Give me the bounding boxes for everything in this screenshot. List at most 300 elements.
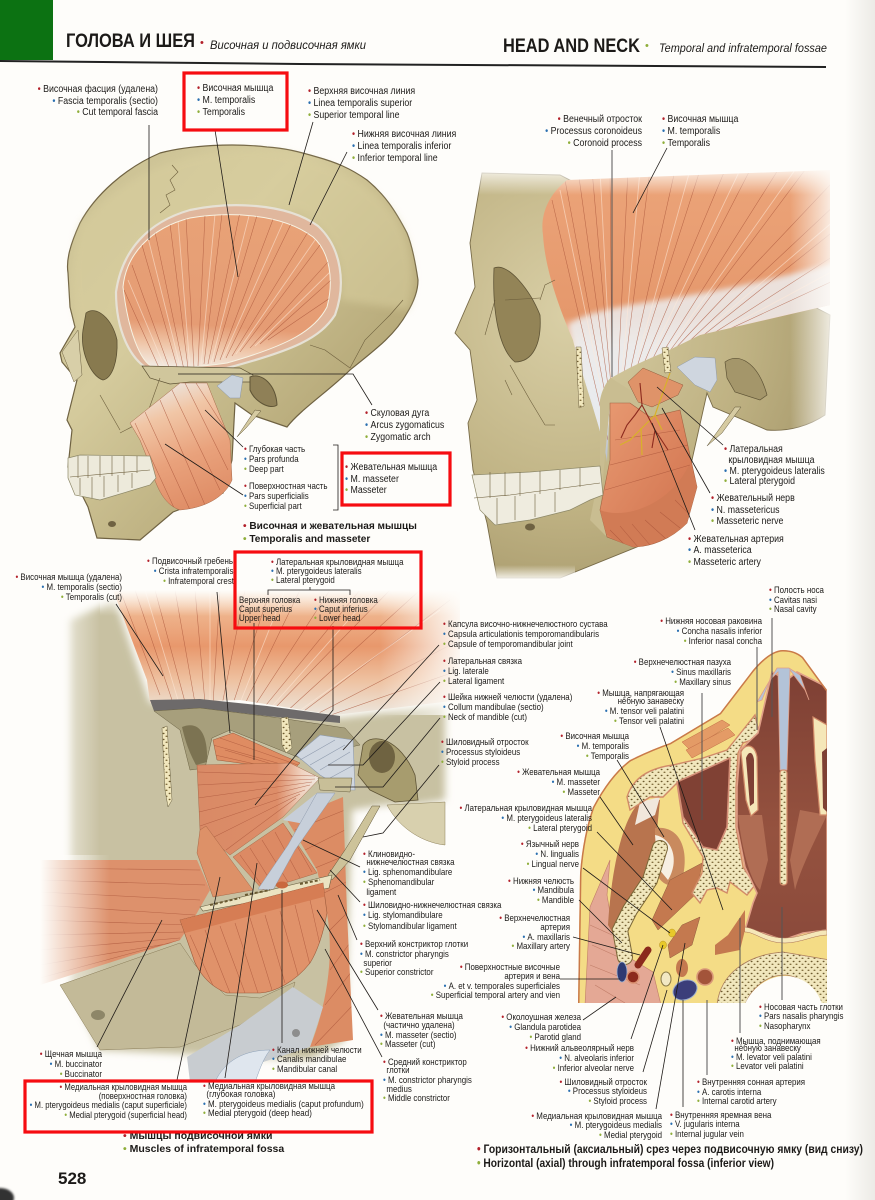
label: nasal cavity: • Nasal cavity <box>769 603 817 614</box>
label: middle constrictor: • Средний констриктор <box>383 1056 467 1067</box>
label: zygomatic arch <box>365 406 445 442</box>
nerve branches <box>620 373 670 455</box>
label: internal jugular vein <box>670 1109 772 1139</box>
label: superficial temporal vessels: • A. et v. temporales superficiales <box>444 980 560 991</box>
label: internal carotid artery <box>697 1076 805 1106</box>
hyoid region bright patch <box>215 1050 270 1082</box>
label: neck of mandible: • Шейка нижней челюсти (удалена) <box>443 691 572 702</box>
label: medial pterygoid deep head: • Medial pterygoid (deep head) <box>203 1107 312 1118</box>
sphenomandibular ligament <box>258 793 335 890</box>
label: mandibular canal: • Канал нижней челюсти <box>272 1044 362 1055</box>
label: medial pterygoid superficial head: • Медиальная крыловидная мышца <box>60 1081 187 1092</box>
label: tensor veli palatini: • M. tensor veli palatini <box>605 705 684 716</box>
label: sphenomandibular ligament: • Клиновидно- <box>363 848 415 859</box>
label: masseter: • Masseter <box>345 483 387 495</box>
label: neck of mandible: • Collum mandibulae (sectio) <box>443 701 544 712</box>
label: buccinator: • Щечная мышца <box>40 1048 102 1059</box>
callout: medial pterygoid highlight box <box>25 1081 372 1132</box>
label: mandible: • Mandible <box>537 894 574 905</box>
label: parotid gland <box>501 1011 581 1042</box>
label: superficial temporal vessels: • Superficial temporal artery and vien <box>431 989 560 1000</box>
label: temporalis <box>197 81 274 117</box>
label: masseter <box>345 460 438 495</box>
buccinator <box>40 860 210 985</box>
figure title: infratemporal muscles <box>123 1130 284 1155</box>
label: lateral pterygoid heads: Верхняя головка <box>239 594 300 605</box>
label: lateral pterygoid section: • M. pterygoideus lateralis <box>501 812 592 823</box>
white fade over top and right <box>470 165 840 195</box>
styloid ring <box>661 972 671 986</box>
label: temporalis cut: • Височная мышца (удалена) <box>15 571 122 582</box>
label: masseteric artery <box>688 532 784 567</box>
label: temporalis right: • Temporalis <box>662 136 710 148</box>
label: medial pterygoid section: • M. pterygoideus medialis <box>570 1119 662 1130</box>
label: temporalis: • Temporalis <box>197 105 245 117</box>
label: inferior nasal concha: • Inferior nasal concha <box>684 635 762 646</box>
label: maxillary artery: артерия <box>540 921 570 932</box>
label: superior constrictor <box>360 938 468 977</box>
masseter cut <box>180 883 327 993</box>
label: sphenomandibular ligament: ligament <box>366 886 397 897</box>
page number: 528 <box>58 1169 86 1188</box>
label: tensor veli palatini: • Tensor veli palatini <box>614 715 684 726</box>
header: russian title <box>66 31 367 52</box>
label: lingual nerve: • Язычный нерв <box>521 838 579 849</box>
label: parotid gland: • Parotid gland <box>529 1031 581 1042</box>
label: masseteric artery: • A. masseterica <box>688 543 752 555</box>
nasal opening <box>62 330 82 382</box>
label: maxillary sinus: • Maxillary sinus <box>674 676 731 687</box>
illustration: deep dissection with temporalis, masseter cut <box>455 165 840 581</box>
mandible <box>620 848 660 957</box>
figure title: axial section <box>477 1144 863 1170</box>
label: zygomatic arch: • Скуловая дуга <box>365 406 430 418</box>
label: maxillary artery <box>499 912 571 951</box>
label: lingual nerve: • Lingual nerve <box>527 858 579 869</box>
label: superior temporal line: • Superior temporal line <box>308 108 400 120</box>
label: temporalis: • M. temporalis <box>197 93 256 105</box>
maxilla and zygomatic bones <box>627 715 760 903</box>
figure title: temporalis and masseter: • Височная и жевательная мышцы <box>243 521 417 532</box>
label: deep part: • Pars profunda <box>244 453 299 464</box>
label: tensor veli palatini <box>597 687 685 726</box>
illustration: infratemporal fossa dissection <box>40 590 465 1082</box>
label: levator veli palatini: • Levator veli palatini <box>731 1060 804 1071</box>
temporal line band <box>116 205 341 370</box>
label: nasal cavity: • Cavitas nasi <box>769 594 817 605</box>
label: styloid process section: • Шиловидный отросток <box>559 1076 647 1087</box>
maxillary artery <box>638 950 648 965</box>
label: masseter cut: (частично удалена) <box>383 1019 455 1030</box>
label: medial pterygoid superficial head: • M. pterygoideus medialis (caput superficiale) <box>30 1099 187 1110</box>
label: parotid gland: • Околоушная железа <box>501 1011 581 1022</box>
label: lingual nerve <box>521 838 579 869</box>
label: temporalis right: • M. temporalis <box>662 124 721 136</box>
label: masseteric artery: • Жевательная артерия <box>688 532 784 544</box>
temporalis muscle <box>542 170 830 462</box>
label: maxillary sinus: • Верхнечелюстная пазуха <box>634 656 731 667</box>
parotid gland <box>585 860 661 1005</box>
label: mandible: • Mandibula <box>533 884 574 895</box>
label: lateral pterygoid heads: • Caput inferius <box>314 603 368 614</box>
label: mandibular canal <box>272 1044 362 1074</box>
right concha <box>813 717 827 815</box>
medial pterygoid <box>668 917 700 958</box>
label: internal jugular vein: • Internal jugular vein <box>670 1128 744 1139</box>
label: masseter cut: • Жевательная мышца <box>380 1010 463 1021</box>
tmj capsule <box>677 357 717 392</box>
label: middle constrictor: • M. constrictor pharyngis <box>383 1074 472 1085</box>
label: superficial temporal vessels: • Поверхностные височные <box>460 961 560 972</box>
temporalis <box>655 828 685 885</box>
lateral pterygoid <box>628 368 683 407</box>
label: coronoid process: • Coronoid process <box>568 136 642 148</box>
label: mandible: • Нижняя челюсть <box>508 875 574 886</box>
temporalis muscle <box>123 215 330 368</box>
label: buccinator: • M. buccinator <box>50 1058 102 1069</box>
label: inferior temporal line: • Inferior temporal line <box>352 151 438 163</box>
label: sphenomandibular ligament: • Sphenomandibular <box>363 876 434 887</box>
header: russian title: • <box>200 37 204 49</box>
mental foramen <box>525 524 535 530</box>
inferior conchae folds <box>738 815 768 890</box>
label: masseter section <box>517 766 600 797</box>
green chapter tab <box>0 0 53 60</box>
label: stylomandibular ligament: • Шиловидно-нижнечелюстная связка <box>363 899 502 910</box>
ear canal <box>250 376 277 407</box>
label: temporalis: • Височная мышца <box>197 81 274 93</box>
label: temporalis cut <box>15 571 122 602</box>
cut ends of zygoma <box>162 726 172 807</box>
leader lines <box>97 122 782 1109</box>
label: lateral pterygoid upper right: • M. pterygoideus lateralis <box>724 464 825 476</box>
label: superior constrictor: • M. constrictor pharyngis <box>360 948 449 959</box>
label: stylomandibular ligament: • Stylomandibular ligament <box>363 920 457 931</box>
label: internal carotid artery: • Internal carotid artery <box>697 1095 777 1106</box>
maxillary sinus <box>677 758 730 850</box>
label: lateral pterygoid heads: • Латеральная крыловидная мышца <box>271 556 404 567</box>
label: levator veli palatini: • Мышца, поднимающая <box>731 1035 821 1046</box>
label: infratemporal crest: • Crista infratemporalis <box>154 565 233 576</box>
skull sutures <box>100 165 403 433</box>
label: nasopharynx: • Nasopharynx <box>759 1020 811 1031</box>
label: lateral pterygoid section <box>460 802 592 833</box>
label: tmj capsule: • Capsule of temporomandibular joint <box>443 638 573 649</box>
header: english title <box>503 36 827 57</box>
label: internal carotid artery: • Внутренняя сонная артерия <box>697 1076 805 1087</box>
label: lateral pterygoid upper right: • Lateral pterygoid <box>724 474 795 486</box>
label: masseteric nerve: • Жевательный нерв <box>711 491 795 503</box>
label: coronoid process: • Processus coronoideus <box>545 124 642 136</box>
zygomatic arch <box>142 366 253 384</box>
label: styloid process: • Processus styloideus <box>441 746 520 757</box>
label: temporal fascia: • Cut temporal fascia <box>77 105 159 117</box>
label: styloid process section <box>559 1076 647 1106</box>
label: lateral pterygoid section: • Латеральная крыловидная мышца <box>460 802 592 813</box>
styloid process <box>237 410 261 437</box>
label: infratemporal crest <box>147 555 235 586</box>
label: lateral pterygoid heads: • Нижняя головка <box>314 594 378 605</box>
grey fascia patch <box>283 793 334 825</box>
label: lateral ligament <box>443 655 522 686</box>
mastoid <box>387 802 445 845</box>
label: levator veli palatini <box>731 1035 821 1071</box>
label: masseter cut: • Masseter (cut) <box>380 1038 436 1049</box>
label: maxillary artery: • A. maxillaris <box>522 931 570 942</box>
pharyngeal constrictor <box>287 797 353 1047</box>
label: tmj capsule <box>443 618 608 649</box>
label: coronoid process: • Венечный отросток <box>558 112 643 124</box>
label: superior constrictor: • Верхний констриктор глотки <box>360 938 468 949</box>
header rule <box>0 60 826 68</box>
medial pterygoid deep head <box>233 823 317 890</box>
label: masseteric artery: • Masseteric artery <box>688 555 761 567</box>
label: masseter section: • Masseter <box>563 786 600 797</box>
figure title: infratemporal muscles: • Мышцы подвисочной ямки <box>123 1130 272 1142</box>
pterygoid muscle near pharynx <box>715 910 745 955</box>
label: masseteric nerve <box>711 491 795 526</box>
label: temporal fascia <box>38 82 159 117</box>
label: styloid process: • Шиловидный отросток <box>441 736 529 747</box>
label: inferior temporal line: • Нижняя височная линия <box>352 127 456 139</box>
nasal septum <box>757 668 809 770</box>
nasal cavity <box>737 672 827 940</box>
label: lateral ligament: • Lateral ligament <box>443 675 505 686</box>
label: mandible <box>508 875 574 905</box>
label: superior constrictor: • Superior constrictor <box>360 966 434 977</box>
header: english title: HEAD AND NECK <box>503 36 640 57</box>
lateral pterygoid lower head <box>197 763 320 855</box>
label: superior constrictor: superior <box>363 957 392 968</box>
mandible lower bone <box>60 943 295 1050</box>
callout: masseter highlight box <box>342 453 450 505</box>
temporal vein <box>617 962 627 982</box>
label: zygomatic arch: • Zygomatic arch <box>365 430 431 442</box>
label: lateral pterygoid heads: • M. pterygoideus lateralis <box>271 565 362 576</box>
left bone fade <box>40 600 100 860</box>
label: lateral pterygoid heads <box>239 556 404 623</box>
label: nasopharynx: • Носовая часть глотки <box>759 1001 843 1012</box>
label: temporalis right: • Височная мышца <box>662 112 739 124</box>
styloid process <box>328 806 380 880</box>
left concha <box>741 746 758 816</box>
mandibular canal <box>276 882 288 888</box>
label: lateral pterygoid upper right: крыловидная мышца <box>728 453 815 465</box>
label: lateral pterygoid heads: • Lower head <box>314 612 360 623</box>
label: styloid process section: • Processus styloideus <box>568 1085 647 1096</box>
label: inferior nasal concha: • Нижняя носовая раковина <box>660 615 762 626</box>
label: superficial part: • Pars superficialis <box>244 490 309 501</box>
styloid process <box>707 407 741 446</box>
facial sutures <box>485 280 555 425</box>
cranium shading <box>72 149 413 340</box>
cut zygomatic bones <box>576 347 584 408</box>
label: neck of mandible <box>443 691 572 722</box>
label: medial pterygoid superficial head <box>30 1081 187 1120</box>
articular fossa <box>358 739 418 802</box>
callout: lateral pterygoid highlight box <box>235 552 421 628</box>
label: maxillary sinus: • Sinus maxillaris <box>671 666 731 677</box>
muscle above jugular <box>676 959 688 977</box>
label: coronoid process <box>545 112 643 148</box>
label: inferior nasal concha <box>660 615 762 646</box>
label: medial pterygoid superficial head: (поверхностная головка) <box>99 1090 187 1101</box>
skull base bone <box>717 952 830 1005</box>
label: temporalis section: • Височная мышца <box>560 730 629 741</box>
temporal artery <box>627 971 639 983</box>
figure title: axial section: • Horizontal (axial) through infratemporal fossa (inferior view) <box>477 1158 774 1170</box>
nerves <box>668 929 676 937</box>
label: middle constrictor: medius <box>386 1083 412 1094</box>
upper and lower teeth <box>68 455 156 500</box>
label: nasopharynx: • Pars nasalis pharyngis <box>759 1010 843 1021</box>
label: maxillary artery: • Maxillary artery <box>511 940 571 951</box>
label: neck of mandible: • Neck of mandible (cut) <box>443 711 527 722</box>
label: superior temporal line <box>308 84 415 120</box>
label: nasal cavity: • Полость носа <box>769 584 824 595</box>
illustration: axial section through infratemporal fossa <box>570 640 830 1010</box>
label: styloid process <box>441 736 529 767</box>
header: russian title: ГОЛОВА И ШЕЯ <box>66 31 195 52</box>
label: medial pterygoid deep head: (глубокая головка) <box>206 1088 276 1099</box>
label: middle constrictor: • Middle constrictor <box>383 1092 450 1103</box>
label: medial pterygoid deep head <box>203 1080 364 1118</box>
label: superficial temporal vessels <box>431 961 560 1000</box>
label: masseter section: • Жевательная мышца <box>517 766 600 777</box>
masseter <box>130 383 232 510</box>
label: lateral pterygoid upper right <box>724 442 825 486</box>
header: russian title: Височная и подвисочная ямки <box>210 40 367 52</box>
label: middle constrictor <box>383 1056 472 1103</box>
label: temporalis right <box>662 112 739 148</box>
teeth <box>472 466 603 525</box>
label: medial pterygoid section <box>531 1110 662 1140</box>
mandible cut section <box>200 875 332 911</box>
page corner shadow <box>0 1188 14 1200</box>
label: superficial part: • Поверхностная часть <box>244 480 328 491</box>
figure title: infratemporal muscles: • Muscles of infratemporal fossa <box>123 1143 284 1155</box>
medial pterygoid superficial head <box>197 826 253 897</box>
label: inferior alveolar nerve: • N. alveolaris inferior <box>559 1052 634 1063</box>
label: superficial part <box>244 480 328 511</box>
label: medial pterygoid deep head: • M. pterygoideus medialis (caput profundum) <box>203 1098 364 1109</box>
label: sphenomandibular ligament <box>363 848 455 897</box>
label: tmj capsule: • Capsula articulationis temporomandibularis <box>443 628 599 639</box>
label: inferior temporal line <box>352 127 456 163</box>
lateral pterygoid <box>652 863 702 930</box>
label: masseteric nerve: • N. massetericus <box>711 503 780 515</box>
label: masseter: • Жевательная мышца <box>345 460 438 472</box>
label: superficial part: • Superficial part <box>244 500 302 511</box>
label: temporalis section <box>560 730 629 761</box>
label: lateral ligament: • Латеральная связка <box>443 655 522 666</box>
eye orbit <box>494 267 540 362</box>
masseter cut <box>600 403 697 547</box>
label: levator veli palatini: • M. levator veli palatini <box>731 1051 812 1062</box>
jugular vein <box>672 979 698 1001</box>
label: inferior alveolar nerve <box>525 1042 634 1073</box>
label: infratemporal crest: • Подвисочный гребень <box>147 555 233 566</box>
carotid vessel <box>697 969 713 985</box>
label: nasal cavity <box>769 584 824 614</box>
label: tmj capsule: • Капсула височно-нижнечелюстного сустава <box>443 618 608 629</box>
label: styloid process: • Styloid process <box>441 756 500 767</box>
label: masseter cut <box>380 1010 463 1049</box>
label: parotid gland: • Glandula parotidea <box>509 1021 581 1032</box>
label: masseter cut: • M. masseter (sectio) <box>380 1029 457 1040</box>
coronoid process <box>590 378 640 537</box>
temporalis muscle <box>113 590 460 715</box>
tmj capsule and ligament <box>296 735 355 790</box>
label: masseteric nerve: • Masseteric nerve <box>711 514 783 526</box>
label: deep part: • Глубокая часть <box>244 443 306 454</box>
label: superior temporal line: • Linea temporalis superior <box>308 96 412 108</box>
label: lateral pterygoid section: • Lateral pterygoid <box>528 822 592 833</box>
label: zygomatic arch: • Arcus zygomaticus <box>365 418 445 430</box>
label: styloid process section: • Styloid process <box>588 1095 647 1106</box>
label: temporalis cut: • Temporalis (cut) <box>61 591 122 602</box>
label: levator veli palatini: нёбную занавеску <box>734 1042 801 1053</box>
label: infratemporal crest: • Infratemporal crest <box>163 575 235 586</box>
masseter <box>608 800 660 945</box>
label: stylomandibular ligament: • Lig. stylomandibulare <box>363 909 443 920</box>
label: lateral pterygoid heads: • Lateral pterygoid <box>271 574 335 585</box>
header: english title: Temporal and infratemporal fossae <box>659 43 827 55</box>
label: stylomandibular ligament <box>363 899 502 931</box>
label: masseter: • M. masseter <box>345 472 399 484</box>
label: internal jugular vein: • Внутренняя яремная вена <box>670 1109 772 1120</box>
label: internal jugular vein: • V. jugularis interna <box>670 1118 740 1129</box>
mandibular neck cut <box>318 778 352 792</box>
label: inferior alveolar nerve: • Inferior alveolar nerve <box>553 1062 634 1073</box>
label: middle constrictor: глотки <box>386 1064 410 1075</box>
ear fossa <box>725 358 767 400</box>
label: maxillary artery: • Верхнечелюстная <box>499 912 570 923</box>
mental foramen <box>108 521 116 527</box>
eye orbit <box>82 311 117 380</box>
label: lateral pterygoid upper right: • Латеральная <box>724 442 783 454</box>
callout: temporalis highlight box <box>184 73 287 130</box>
figure title: temporalis and masseter: • Temporalis and masseter <box>243 534 370 545</box>
label: internal carotid artery: • A. carotis interna <box>697 1086 761 1097</box>
illustration: skull with temporalis and masseter <box>60 145 418 540</box>
label: medial pterygoid section: • Медиальная крыловидная мышца <box>531 1110 662 1121</box>
label: sphenomandibular ligament: • Lig. sphenomandibulare <box>363 866 452 877</box>
grey fascia under mandible <box>187 987 323 1082</box>
skin border <box>578 650 827 1003</box>
label: lingual nerve: • N. lingualis <box>535 848 579 859</box>
label: buccinator <box>40 1048 102 1079</box>
palate edge <box>743 927 827 943</box>
label: tensor veli palatini: • Мышца, напрягающая <box>597 687 684 698</box>
label: mandibular canal: • Mandibular canal <box>272 1063 337 1074</box>
tmj capsule <box>217 375 243 398</box>
label: temporalis cut: • M. temporalis (sectio) <box>42 581 122 592</box>
label: temporal fascia: • Fascia temporalis (sectio) <box>52 94 158 106</box>
label: temporalis section: • M. temporalis <box>577 740 629 751</box>
label: masseter section: • M. masseter <box>552 776 600 787</box>
label: deep part: • Deep part <box>244 463 284 474</box>
label: sphenomandibular ligament: нижнечелюстная связка <box>366 856 455 867</box>
pterygoid plate recess <box>182 725 207 765</box>
label: maxillary sinus <box>634 656 731 687</box>
label: inferior nasal concha: • Concha nasalis inferior <box>677 625 762 636</box>
label: inferior alveolar nerve: • Нижний альвеолярный нерв <box>525 1042 634 1053</box>
label: lateral pterygoid heads: Upper head <box>239 612 280 623</box>
artery branches <box>621 383 668 450</box>
label: mandibular canal: • Canalis mandibulae <box>272 1053 347 1064</box>
label: medial pterygoid section: • Medial pterygoid <box>599 1129 662 1140</box>
